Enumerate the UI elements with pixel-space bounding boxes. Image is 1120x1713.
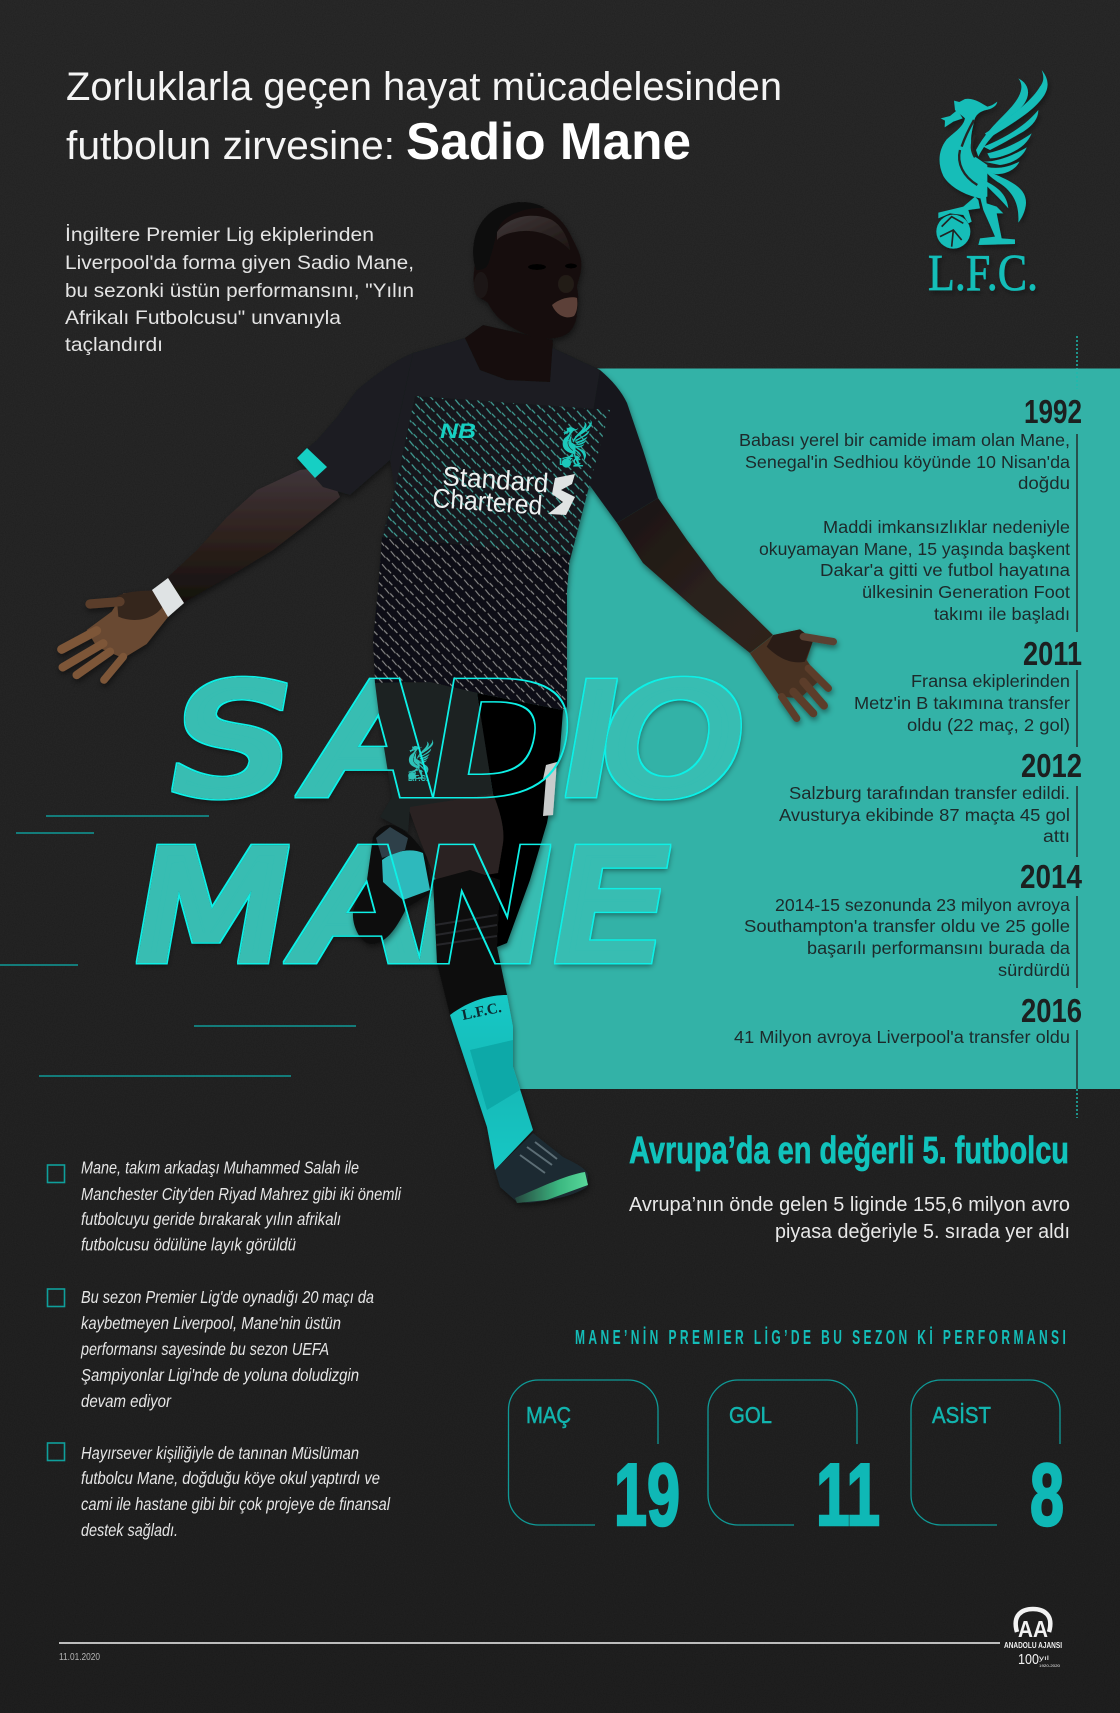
shorts front xyxy=(375,682,493,832)
bullet 1: futbolcusu ödülüne layık görüldü xyxy=(81,1234,296,1254)
timeline text xyxy=(734,393,1083,1047)
year 1992: takımı ile başladı xyxy=(934,604,1070,624)
year 2011 xyxy=(854,635,1082,735)
right arm xyxy=(617,498,773,653)
timeline rule xyxy=(1076,336,1078,1118)
sock label: L.F.C. xyxy=(461,1000,503,1024)
year 1992: 1992 xyxy=(1024,393,1082,430)
big name fill xyxy=(120,654,758,993)
bullet 2: performansı sayesinde bu sezon UEFA xyxy=(80,1339,329,1359)
left sleeve xyxy=(297,338,465,495)
year 2016: 41 Milyon avroya Liverpool'a transfer oldu xyxy=(734,1027,1070,1047)
ear xyxy=(474,272,488,298)
logo: Anadolu Ajansi: AA xyxy=(1018,1616,1048,1642)
year 2014: 2014-15 sezonunda 23 milyon avroya xyxy=(775,895,1070,915)
year 2011: 2011 xyxy=(1023,635,1082,672)
bullet 1: Mane, takım arkadaşı Muhammed Salah ile xyxy=(81,1158,359,1178)
year 2011: Metz'in B takımına transfer xyxy=(854,693,1070,713)
year 2012: attı xyxy=(1043,826,1070,846)
mouth xyxy=(552,297,577,317)
big name outline xyxy=(120,654,758,993)
shirt crest: LFC xyxy=(559,457,581,468)
stat: assists: ASİST xyxy=(932,1402,991,1428)
bullet 2: devam ediyor xyxy=(81,1391,172,1411)
text: value: piyasa değeriyle 5. sırada yer aldı xyxy=(775,1221,1070,1243)
neck xyxy=(465,325,553,382)
back leg boot xyxy=(353,825,432,944)
stat: assists: 8 xyxy=(1030,1445,1064,1544)
bullet 3 xyxy=(48,1443,391,1540)
left arm xyxy=(168,467,340,603)
year 2012: 2012 xyxy=(1021,747,1082,784)
stat: goals: GOL xyxy=(729,1402,772,1428)
stat: matches xyxy=(508,1380,680,1544)
year 1992: okuyamayan Mane, 15 yaşında başkent xyxy=(759,539,1070,559)
bullet 2: Şampiyonlar Ligi'nde de yoluna doludizgin xyxy=(81,1365,359,1385)
year 1992: Babası yerel bir camide imam olan Mane, xyxy=(739,430,1070,450)
shorts back xyxy=(477,693,563,947)
intro text xyxy=(65,223,414,356)
brand logo: NB xyxy=(440,420,476,443)
bullet 2: kaybetmeyen Liverpool, Mane'nin üstün xyxy=(81,1313,341,1333)
year 2011: Fransa ekiplerinden xyxy=(911,671,1070,691)
icon: Liverpool crest: L.F.C. xyxy=(928,245,1038,302)
year 1992: Senegal'in Sedhiou köyünde 10 Nisan'da xyxy=(745,452,1070,472)
stat: matches: 19 xyxy=(614,1445,680,1544)
year 2012: Avusturya ekibinde 87 maçta 45 gol xyxy=(779,805,1070,825)
bullet 3: Hayırsever kişiliğiyle de tanınan Müslüman xyxy=(81,1443,359,1463)
stat: goals: 11 xyxy=(816,1445,880,1544)
text: value: Avrupa’nın önde gelen 5 liginde 155,6 milyon avro xyxy=(629,1194,1070,1216)
intro text: Liverpool'da forma giyen Sadio Mane, xyxy=(65,252,414,274)
text: value xyxy=(629,1194,1070,1243)
footer rule xyxy=(59,1642,1000,1644)
year 1992: doğdu xyxy=(1018,473,1070,493)
big name fill: SADIO xyxy=(160,654,758,827)
year 2016: 2016 xyxy=(1021,992,1082,1029)
bullet 3: futbolcu Mane, doğduğu köye okul yaptırdı ve xyxy=(81,1468,380,1488)
shirt number xyxy=(543,762,557,816)
hair xyxy=(473,202,545,270)
year 1992: Dakar'a gitti ve futbol hayatına xyxy=(820,560,1070,580)
year 2014 xyxy=(744,858,1083,980)
big name fill: MANE xyxy=(120,820,681,993)
intro text: Afrikalı Futbolcusu" unvanıyla xyxy=(65,307,341,329)
stat: assists xyxy=(911,1380,1064,1544)
title: Sadio Mane xyxy=(406,113,691,171)
intro text: taçlandırdı xyxy=(65,334,163,356)
bullet 3: cami ile hastane gibi bir çok projeye de finansal xyxy=(81,1494,391,1514)
sponsor mark xyxy=(548,474,575,515)
logo: Anadolu Ajansi xyxy=(1004,1609,1062,1668)
head xyxy=(473,202,581,339)
title: Zorluklarla geçen hayat mücadelesinden xyxy=(66,65,782,109)
bullet 3: destek sağladı. xyxy=(81,1520,178,1540)
date: 11.01.2020 xyxy=(59,1652,100,1663)
year 2011: oldu (22 maç, 2 gol) xyxy=(907,715,1070,735)
bullet list xyxy=(48,1158,402,1540)
shirt body xyxy=(373,338,610,710)
big name outline: MANE xyxy=(120,820,681,993)
year 1992 xyxy=(739,393,1082,624)
intro text: İngiltere Premier Lig ekiplerinden xyxy=(65,223,374,246)
bullet 2: Bu sezon Premier Lig'de oynadığı 20 maçı da xyxy=(81,1287,374,1307)
decorative speed lines xyxy=(0,816,356,1076)
logo: Anadolu Ajansi: 1920-2020 xyxy=(1039,1664,1060,1668)
sleeve band xyxy=(297,448,327,478)
eyes xyxy=(528,264,577,270)
year 1992: ülkesinin Generation Foot xyxy=(862,582,1070,602)
title: futbolun zirvesine: xyxy=(66,124,395,168)
nose xyxy=(558,275,574,293)
shirt crest xyxy=(559,419,592,468)
wristband xyxy=(152,578,184,617)
front boot xyxy=(495,1133,588,1203)
year 2014: sürdürdü xyxy=(998,960,1070,980)
right hand xyxy=(750,629,833,718)
year 2012 xyxy=(779,747,1082,846)
bullet 2 xyxy=(48,1287,374,1411)
teal sock xyxy=(450,995,533,1170)
logo: Anadolu Ajansi: yıl xyxy=(1039,1656,1049,1662)
year 2012: Salzburg tarafından transfer edildi. xyxy=(789,783,1070,803)
stat: matches: MAÇ xyxy=(526,1402,571,1428)
shorts crest xyxy=(408,740,433,783)
year 1992: Maddi imkansızlıklar nedeniyle xyxy=(823,517,1070,537)
intro text: bu sezonki üstün performansını, "Yılın xyxy=(65,280,414,302)
thigh xyxy=(408,794,503,883)
bullet 1: Manchester City'den Riyad Mahrez gibi iki önemli xyxy=(81,1184,402,1204)
big name outline: SADIO xyxy=(160,654,758,827)
logo: Anadolu Ajansi: 100 xyxy=(1018,1651,1039,1668)
year 2014: Southampton'a transfer oldu ve 25 golle xyxy=(744,916,1070,936)
logo: Anadolu Ajansi: ANADOLU AJANSI xyxy=(1004,1640,1062,1650)
sponsor xyxy=(432,461,549,521)
title xyxy=(66,65,782,171)
right sleeve xyxy=(540,348,658,523)
bullet 1 xyxy=(48,1158,402,1254)
stat: goals xyxy=(708,1380,880,1544)
panel: timeline background xyxy=(495,368,1120,1089)
black sock xyxy=(433,870,507,1015)
year 2016 xyxy=(734,992,1082,1047)
left hand xyxy=(62,591,168,680)
year 2014: 2014 xyxy=(1020,858,1083,895)
icon: Liverpool crest xyxy=(928,70,1048,302)
year 2014: başarılı performansını burada da xyxy=(807,938,1070,958)
shorts crest: L.F.C. xyxy=(408,774,428,783)
sponsor: Standard xyxy=(442,461,549,498)
sponsor: Chartered xyxy=(432,483,543,521)
player figure xyxy=(62,202,833,1203)
bullet 1: futbolcuyu geride bırakarak yılın afrikalı xyxy=(81,1209,341,1229)
heading: performance: MANE’NİN PREMIER LİG’DE BU SEZON Kİ PERFORMANSI xyxy=(575,1327,1066,1349)
